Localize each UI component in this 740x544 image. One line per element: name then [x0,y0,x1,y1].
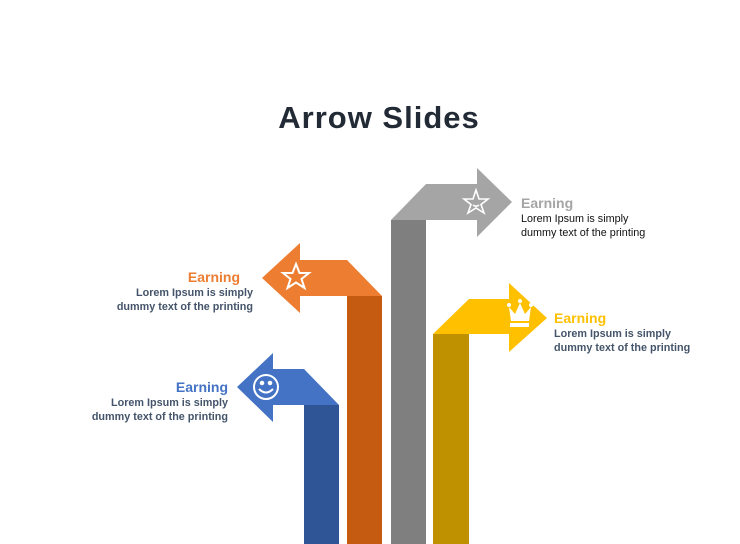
label: blue: Earning [176,379,228,395]
label: gray: Earning [521,195,573,211]
title: Arrow Slides [278,100,480,135]
icon: star face [464,190,488,213]
label: orange: Earning [188,269,240,285]
label: blue [92,379,228,423]
label: gray [521,195,645,239]
label: blue: dummy text of the printing [92,411,228,423]
arrow: blue [237,353,339,544]
label: gray: Lorem Ipsum is simply [521,213,628,225]
icon: crown [507,299,533,327]
arrow: orange [262,243,382,544]
label: yellow: Lorem Ipsum is simply [554,328,671,340]
label: blue: Lorem Ipsum is simply [111,397,228,409]
label: orange: Lorem Ipsum is simply [136,287,253,299]
arrow: gray [391,168,512,544]
label: yellow [554,310,690,354]
icon: smiley [254,375,278,399]
icon: star [283,264,309,288]
label: gray: dummy text of the printing [521,227,645,239]
label: orange: dummy text of the printing [117,301,253,313]
label: orange [117,269,253,313]
arrow: yellow [433,283,547,544]
label: yellow: dummy text of the printing [554,342,690,354]
label: yellow: Earning [554,310,606,326]
